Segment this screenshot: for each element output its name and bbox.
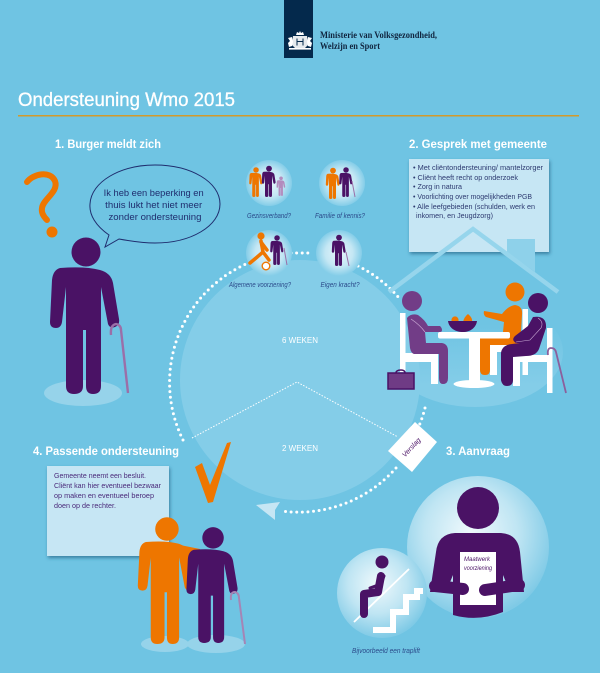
speech bubble [90,165,220,247]
speech bubble: zonder ondersteuning [108,212,202,223]
icon: eigen kracht: Eigen kracht? [320,280,360,289]
speech bubble: thuis lukt het niet meer [105,200,202,211]
panel: gesprek topics: • Met cliëntondersteuning/ mantelzorger [413,163,544,172]
table [438,332,510,388]
big circle with person and document: Maatwerk [464,556,491,563]
ministry name: Welzijn en Sport [320,41,380,51]
panel: besluit [47,466,169,556]
big circle with person and document: voorziening [464,565,492,572]
step 1 options: four question circles [228,160,366,289]
caption: Bijvoorbeeld een traplift [352,646,421,655]
arrow head [256,502,280,520]
speech bubble: Ik heb een beperking en [104,188,204,199]
panel: besluit: Cliënt kan hier eventueel bezwaar [54,481,162,490]
person with cane [44,238,128,406]
icon: gezinsverband: Gezinsverband? [247,211,292,220]
step 1: burger meldt zich [27,139,220,406]
ministry name: Ministerie van Volksgezondheid, [320,30,437,40]
label: 2 weken: 2 WEKEN [282,443,318,453]
cane [548,348,566,393]
label: 6 weken: 6 WEKEN [282,335,318,345]
dotted cycle arcs [170,253,425,512]
verslag document [388,422,437,472]
panel: besluit: doen op de rechter. [54,501,116,510]
person dark seated [501,293,548,386]
two people supporting [138,517,245,653]
big circle with person and document [407,476,549,618]
panel: besluit: op maken en eventueel beroep [54,491,154,500]
briefcase [388,370,414,389]
panel: gesprek topics: • Cliënt heeft recht op onderzoek [413,173,518,182]
panel: gesprek topics: • Zorg in natura [413,182,463,191]
heading 4: 4. Passende ondersteuning [33,446,179,458]
logo ribbon with coat of arms [284,0,313,58]
dotted divider lines [192,382,398,438]
step 4: passende ondersteuning [33,442,245,653]
heading 3: 3. Aanvraag [446,446,510,458]
panel: gesprek topics: inkomen, en Jeugdzorg) [416,211,493,220]
panel: besluit: Gemeente neemt een besluit. [54,471,146,480]
icon: algemene voorziening: Algemene voorziening? [228,280,292,289]
small circle: stairlift [337,548,427,638]
title: Ondersteuning Wmo 2015 [18,90,235,111]
heading 1: 1. Burger meldt zich [55,139,161,151]
verslag document: Verslag [401,437,423,459]
icon: question mark [27,174,58,238]
central circle [180,260,420,500]
logo: Rijksoverheid header [284,0,439,58]
cycle diagram: timeline [170,253,563,520]
panel: gesprek topics: • Voorlichting over mogelijkheden PGB [413,192,532,201]
chairs [400,309,552,393]
person left seated [402,291,448,384]
step 2: gesprek met gemeente [388,139,566,393]
fruit bowl [448,314,477,332]
lighter floor under house [387,297,563,407]
panel: gesprek topics: • Alle leefgebieden (schulden, werk en [413,202,535,211]
panel: gesprek topics [409,159,549,252]
icon: familie of kennis: Familie of kennis? [315,211,366,220]
icon: check mark [195,442,231,503]
step 3: aanvraag [337,446,549,655]
house outline [389,229,558,292]
heading 2: 2. Gesprek met gemeente [409,139,547,151]
person orange seated [480,282,524,375]
